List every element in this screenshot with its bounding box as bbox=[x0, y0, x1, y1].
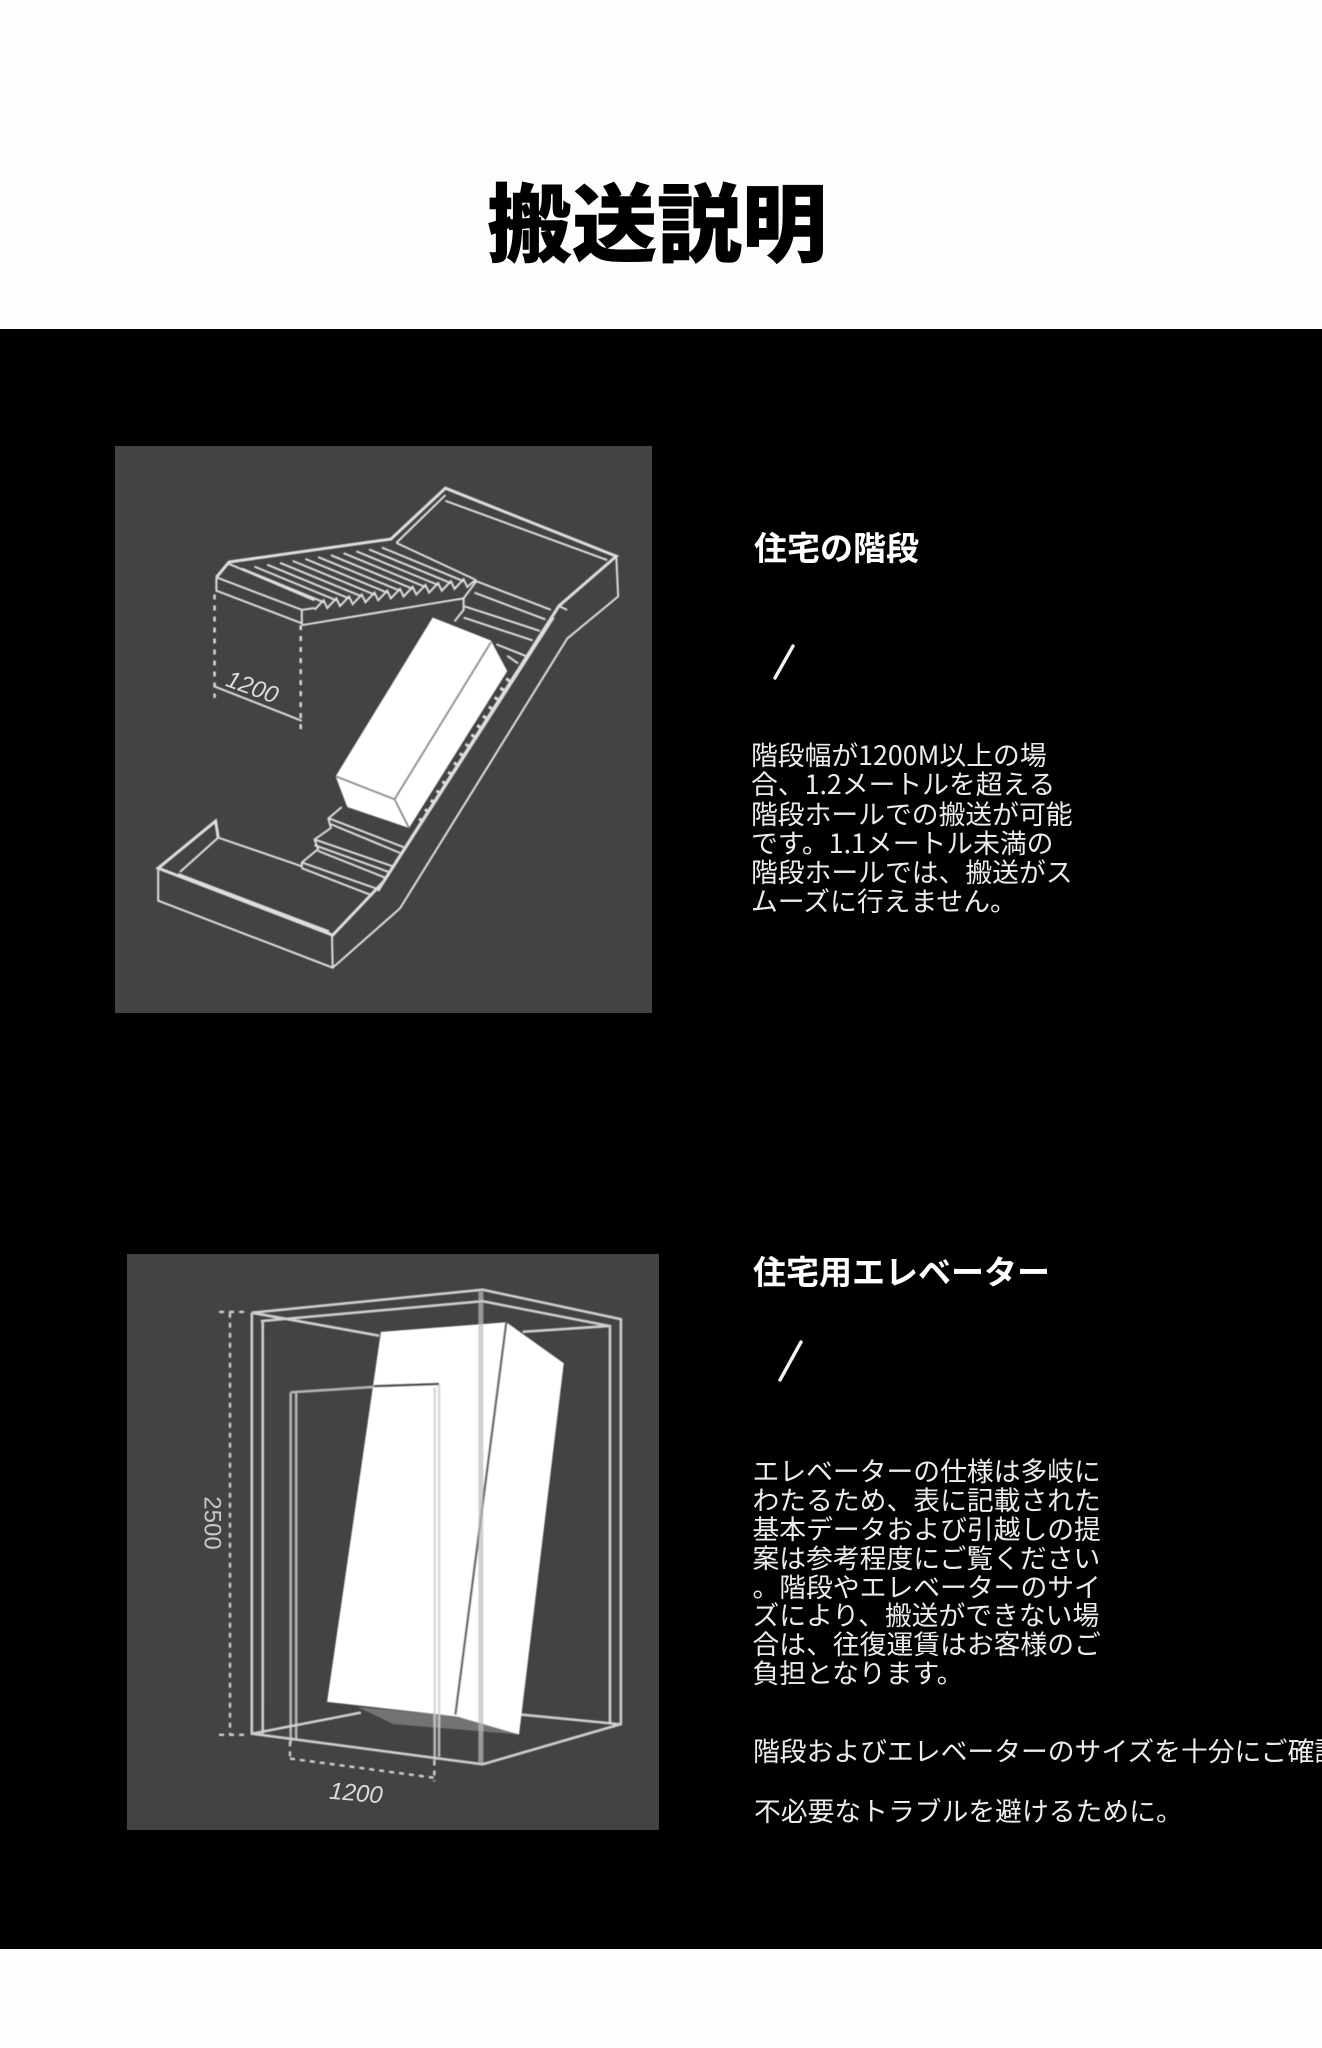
white appliance box bbox=[327, 1322, 564, 1734]
text block: elevator description: 。階段やエレベーターのサイ bbox=[752, 1566, 1101, 1605]
text block: elevator description: エレベーターの仕様は多岐に bbox=[752, 1450, 1101, 1489]
title: 搬送説明 bbox=[487, 157, 827, 280]
text block: elevator description bbox=[752, 1450, 1101, 1691]
text block: stairs description: 階段ホールでの搬送が可能 bbox=[751, 793, 1073, 832]
white box on stairs bbox=[336, 618, 507, 828]
text block: elevator description: 基本データおよび引越しの提 bbox=[752, 1508, 1101, 1547]
text block: elevator description: 案は参考程度にご覧ください bbox=[752, 1537, 1100, 1576]
text block: stairs description: 合、1.2メートルを超える bbox=[751, 763, 1055, 802]
elevator back post bbox=[478, 1292, 483, 1764]
text block: stairs description: 階段ホールでは、搬送がス bbox=[751, 851, 1073, 890]
text block: elevator description: ズにより、搬送ができない場 bbox=[752, 1594, 1099, 1633]
elevator dimension label: 1200: 1200 bbox=[328, 1778, 384, 1809]
text block: elevator description: わたるため、表に記載された bbox=[752, 1479, 1101, 1518]
dimension lines: 1200 bbox=[215, 595, 302, 732]
dimension lines bbox=[219, 1312, 434, 1782]
text block: stairs description: ムーズに行えません。 bbox=[751, 880, 1017, 919]
text block: closing note line 2: 不必要なトラブルを避けるために。 bbox=[754, 1790, 1183, 1829]
elevator dimension label: 2500: 2500 bbox=[198, 1496, 226, 1550]
text block: elevator description: 合は、往復運賃はお客様のご bbox=[752, 1623, 1101, 1662]
stair dimension label: 1200 bbox=[222, 666, 282, 710]
elevator door frame bbox=[291, 1385, 439, 1760]
icon: slash divider stairs bbox=[773, 644, 795, 680]
text block: stairs description: です。1.1メートル未満の bbox=[751, 822, 1053, 861]
black content band bbox=[0, 329, 1322, 1949]
text block: elevator description: 負担となります。 bbox=[752, 1652, 963, 1691]
heading: elevator: 住宅用エレベーター bbox=[753, 1246, 1050, 1294]
icon: slash divider elevator bbox=[778, 1340, 803, 1382]
text block: stairs description bbox=[751, 734, 1073, 919]
text block: stairs description: 階段幅が1200M以上の場 bbox=[751, 734, 1047, 773]
heading: stairs: 住宅の階段 bbox=[754, 522, 919, 570]
